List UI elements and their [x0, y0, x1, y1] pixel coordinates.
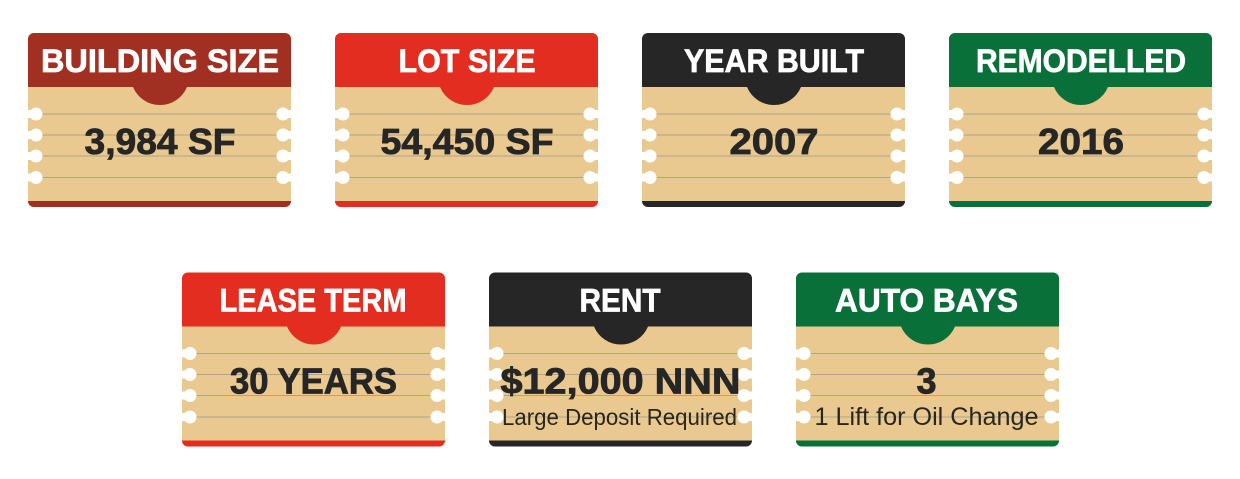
value: 54,450 SF: 54,450 SF	[380, 121, 554, 162]
note: 1 lift for oil change: 1 Lift for Oil Change	[814, 403, 1038, 431]
note: large deposit required: Large Deposit Required	[502, 404, 737, 430]
card: rent	[488, 272, 753, 446]
value: 2016: 2016	[1038, 121, 1124, 162]
value: 3,984 SF: 3,984 SF	[84, 121, 236, 162]
heading: building size: BUILDING SIZE	[41, 43, 279, 79]
heading: rent: RENT	[580, 282, 661, 318]
heading: lease term: LEASE TERM	[220, 282, 406, 318]
value: 30 years: 30 YEARS	[230, 360, 397, 402]
value: 2007: 2007	[730, 121, 818, 162]
value: $12,000 NNN: $12,000 NNN	[500, 360, 740, 402]
heading: year built: YEAR BUILT	[684, 43, 864, 79]
value: 3: 3	[916, 360, 937, 402]
card: remodelled	[948, 33, 1213, 207]
heading: remodelled: REMODELLED	[976, 43, 1186, 79]
card: year built	[641, 33, 906, 207]
card: building size	[27, 33, 292, 207]
card: lease term	[181, 272, 446, 446]
heading: auto bays: AUTO BAYS	[835, 282, 1018, 318]
card: auto bays	[795, 272, 1060, 446]
heading: lot size: LOT SIZE	[398, 43, 536, 79]
card: lot size	[334, 33, 599, 207]
